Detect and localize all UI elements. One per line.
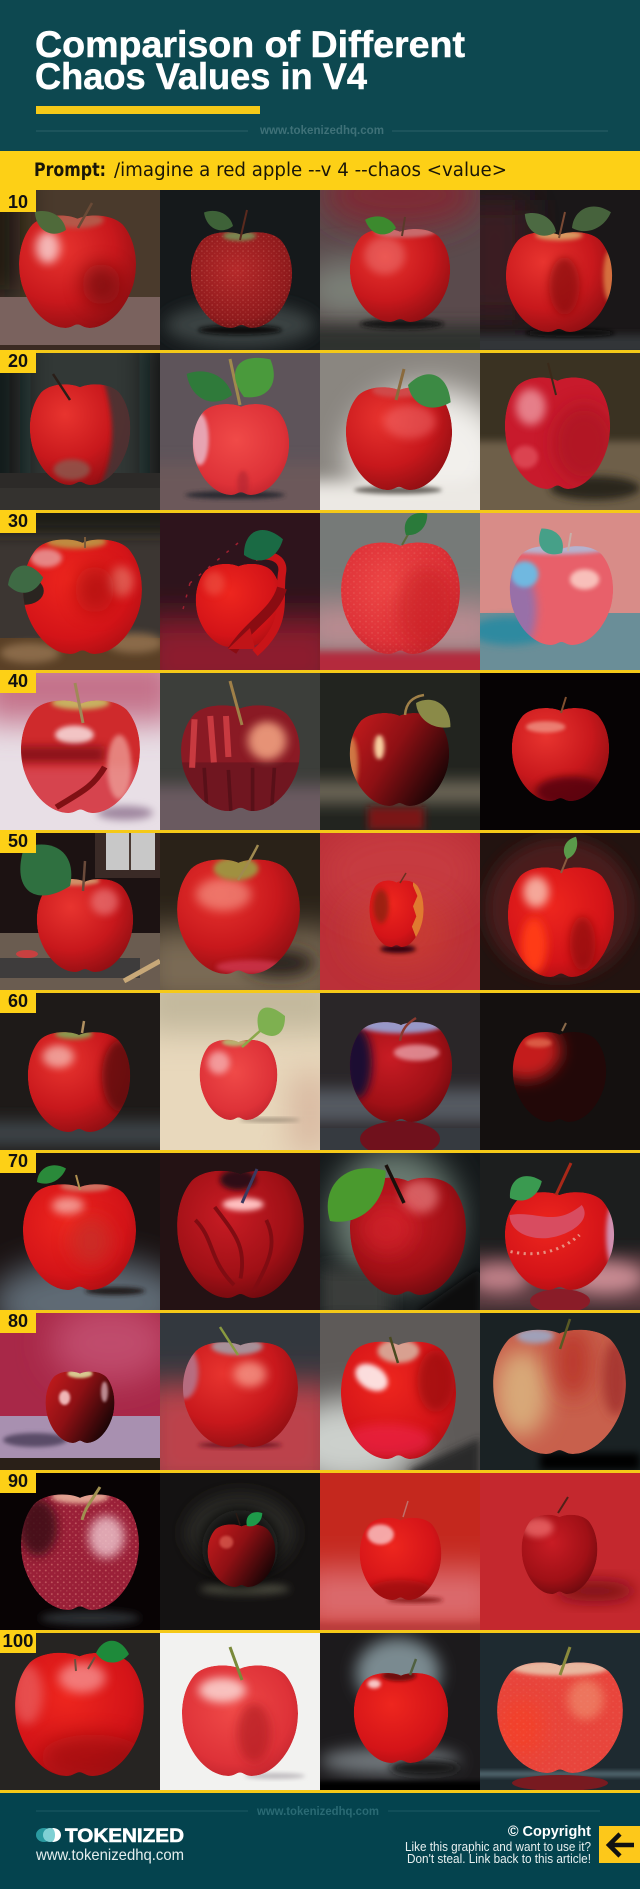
apple tile: chaos 40, image 4 (480, 673, 640, 830)
apple (508, 834, 614, 977)
prompt bar: /imagine a red apple --v 4 --chaos <value> (114, 160, 507, 181)
chaos value labels: 80 (8, 1311, 28, 1331)
apple tile: chaos 50, image 4 (480, 833, 640, 990)
apple tile: chaos 70, image 1 (0, 1153, 160, 1310)
prompt bar (0, 151, 640, 190)
copyright note: Don't steal. Link back to this article! (407, 1851, 591, 1866)
apple tile: chaos 30, image 4 (480, 513, 640, 670)
apple (510, 528, 613, 645)
chaos value labels: 100 (2, 1631, 34, 1651)
apple tile: chaos 10, image 2 (160, 190, 320, 350)
title: Comparison of Different (35, 24, 465, 65)
title: Chaos Values in V4 (35, 56, 367, 97)
apple tile: chaos 60, image 4 (480, 993, 640, 1150)
apple tile: chaos 70, image 3 (320, 1153, 480, 1310)
apple tile: chaos 100, image 3 (320, 1633, 480, 1790)
apple (177, 1169, 304, 1298)
apple tile: chaos 30, image 2 (160, 513, 320, 670)
apple (28, 1021, 139, 1132)
apple (181, 680, 300, 811)
apple tile: chaos 20, image 1 (0, 353, 160, 510)
apple (5, 535, 142, 654)
apple (343, 1017, 452, 1122)
apple (182, 523, 288, 653)
apple (200, 1001, 291, 1120)
apple (360, 1501, 441, 1603)
apple tile: chaos 90, image 4 (480, 1473, 640, 1630)
apple tile: chaos 50, image 3 (320, 833, 480, 990)
header background (0, 0, 640, 151)
apple (182, 1647, 298, 1776)
apple (350, 694, 450, 806)
apple tile: chaos 70, image 2 (160, 1153, 320, 1310)
copyright note (405, 1824, 591, 1866)
apple (522, 1497, 597, 1594)
title (35, 24, 465, 97)
header website text: www.tokenizedhq.com (259, 125, 384, 137)
apple tile: chaos 40, image 3 (320, 673, 480, 830)
apple (493, 1319, 630, 1454)
apple tile: chaos 30, image 3 (320, 513, 480, 670)
apple tile: chaos 20, image 2 (160, 353, 320, 510)
chaos value labels: 60 (8, 991, 28, 1011)
apple tile: chaos 30, image 1 (0, 513, 160, 670)
apple (46, 1369, 114, 1443)
apple tile: chaos 20, image 4 (480, 353, 640, 510)
apple (313, 1152, 466, 1295)
apple tile: chaos 50, image 1 (0, 833, 160, 990)
footer website text: www.tokenizedhq.com (256, 1806, 379, 1818)
apple (186, 358, 290, 495)
apple (191, 206, 292, 328)
chaos value labels: 70 (8, 1151, 28, 1171)
apple (505, 378, 610, 489)
footer background (0, 1793, 640, 1889)
apple tile: chaos 70, image 4 (480, 1153, 640, 1310)
chaos value labels: 50 (8, 831, 28, 851)
apple tile: chaos 50, image 2 (160, 833, 320, 990)
apple tile: chaos 40, image 1 (0, 673, 160, 830)
copyright note: © Copyright (508, 1824, 591, 1840)
chaos value labels: 30 (8, 511, 28, 531)
apple (177, 845, 300, 974)
copyright note: Like this graphic and want to use it? (405, 1839, 591, 1854)
apple (23, 1160, 136, 1290)
apple tile: chaos 60, image 3 (320, 993, 480, 1150)
apple (341, 507, 460, 654)
title underline (36, 106, 260, 114)
apple (170, 1327, 298, 1447)
apple (341, 1337, 456, 1459)
apple tile: chaos 100, image 4 (480, 1633, 640, 1790)
apple tile: chaos 90, image 1 (0, 1473, 160, 1630)
chaos value labels (0, 190, 36, 1653)
Tokenized logo (35, 1825, 184, 1864)
apple (370, 872, 424, 947)
apple tile: chaos 100, image 1 (0, 1633, 160, 1790)
apple (30, 374, 130, 485)
apple tile: chaos 80, image 1 (0, 1313, 160, 1470)
chaos value labels: 40 (8, 671, 28, 691)
apple (492, 1021, 606, 1122)
apple (504, 1163, 619, 1290)
chaos value labels: 90 (8, 1471, 28, 1491)
apple (21, 682, 140, 813)
apple tile: chaos 20, image 3 (320, 353, 480, 510)
apple (354, 1659, 448, 1763)
apple tile: chaos 90, image 3 (320, 1473, 480, 1630)
apple (11, 1640, 145, 1780)
apple tile: chaos 90, image 2 (160, 1473, 320, 1630)
row divider lines (0, 350, 640, 1793)
apple tile: chaos 10, image 4 (480, 190, 640, 350)
apple (20, 844, 134, 972)
icon: back arrow (599, 1826, 640, 1863)
apple tile: chaos 60, image 1 (0, 993, 160, 1150)
apple (506, 200, 616, 332)
Tokenized logo: www.tokenizedhq.com (35, 1847, 184, 1864)
apple (346, 367, 458, 490)
apple (350, 213, 450, 322)
apple tile: chaos 80, image 2 (160, 1313, 320, 1470)
apple tile: chaos 80, image 4 (480, 1313, 640, 1470)
apple (208, 1508, 275, 1587)
chaos value labels: 20 (8, 351, 28, 371)
chaos value labels: 10 (8, 192, 28, 212)
apple (19, 203, 136, 328)
prompt bar: Prompt: (34, 160, 106, 181)
apple tile: chaos 100, image 2 (160, 1633, 320, 1790)
apple tile: chaos 60, image 2 (160, 993, 320, 1150)
apple (19, 1487, 139, 1610)
apple tile: chaos 10, image 3 (320, 190, 480, 350)
Tokenized logo: TOKENIZED (65, 1825, 184, 1847)
apple (512, 697, 609, 807)
apple tile: chaos 80, image 3 (320, 1313, 480, 1470)
apple tile: chaos 40, image 2 (160, 673, 320, 830)
apple tile: chaos 10, image 1 (0, 190, 160, 350)
apple (497, 1647, 623, 1773)
